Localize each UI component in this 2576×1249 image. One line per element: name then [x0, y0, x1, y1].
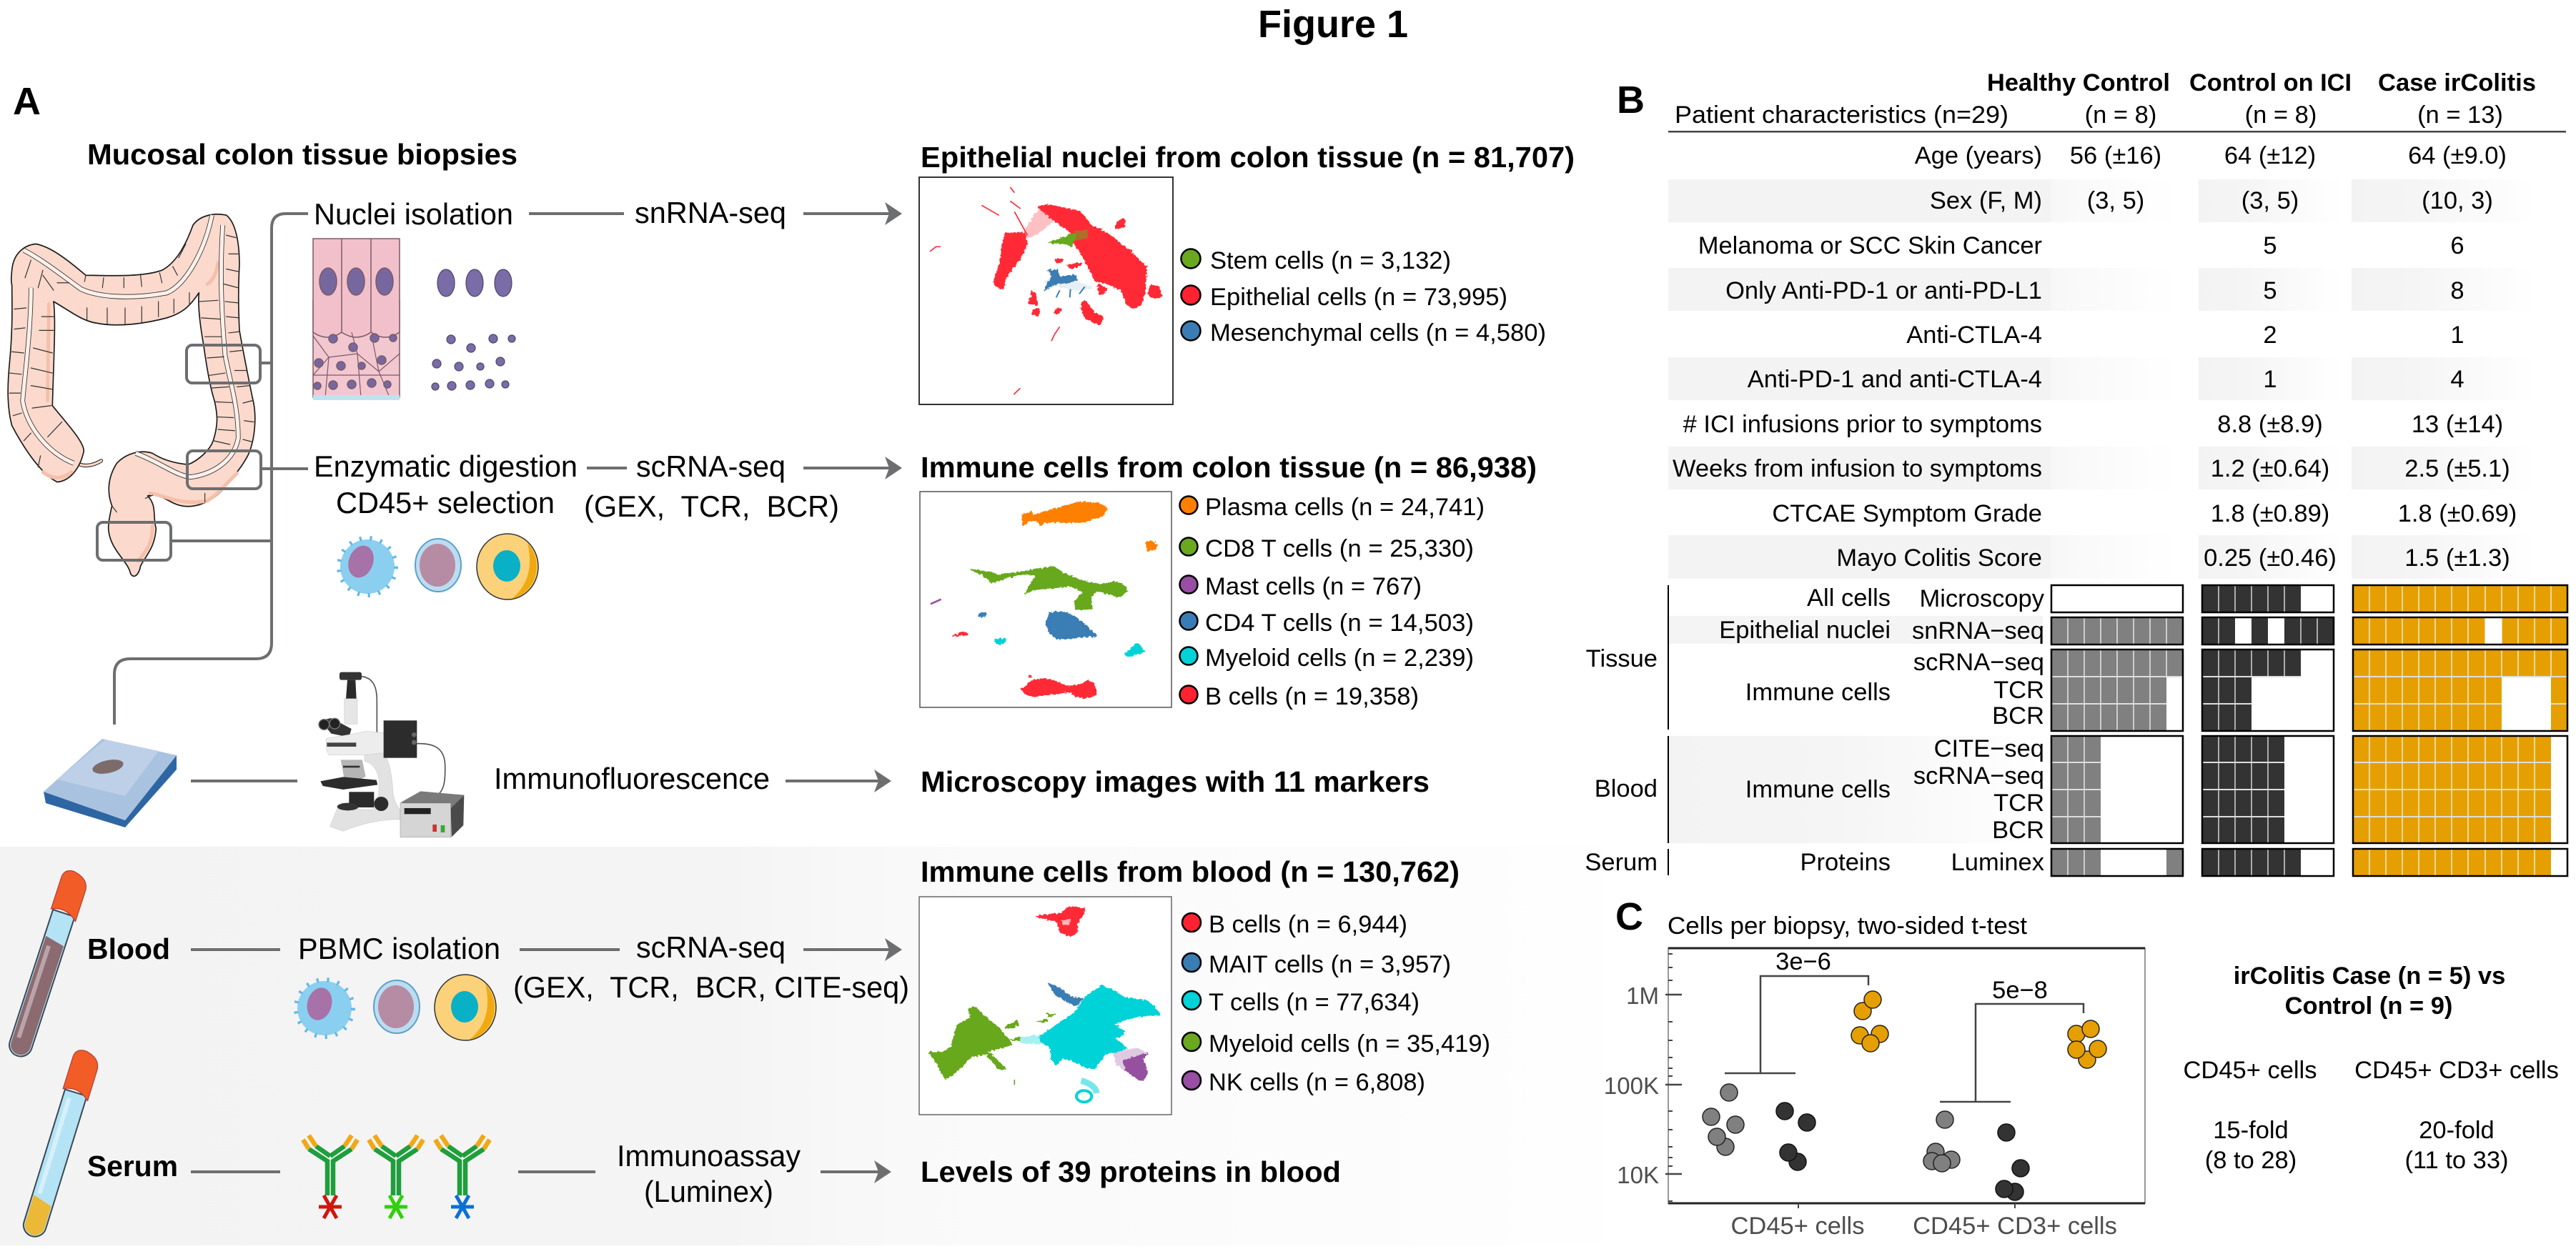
panel A: study workflow — [4, 80, 1575, 1240]
assay labels: scRNA−seq — [1913, 649, 2044, 676]
table rows: 64 (±12) — [2224, 142, 2316, 169]
table rows: 4 — [2450, 366, 2464, 393]
table rows: 1.8 (±0.89) — [2211, 500, 2329, 527]
table rows: Age (years) — [1915, 142, 2042, 169]
legend: blood: B cells (n = 6,944) — [1209, 911, 1407, 938]
panel letter B: B — [1617, 79, 1645, 121]
assay row shading and brackets — [1668, 585, 2044, 875]
table rows: CTCAE Symptom Grade — [1772, 500, 2042, 527]
legend: immune tissue — [1179, 494, 1485, 710]
text: nuclei isolation: Nuclei isolation — [314, 197, 513, 231]
significance bracket left — [1725, 948, 1868, 1073]
legend: immune tissue: CD8 T cells (n = 25,330) — [1205, 535, 1474, 562]
icon: tissue slide — [44, 739, 177, 827]
table rows: 8.8 (±8.9) — [2217, 411, 2323, 438]
fold-change summary: Control (n = 9) — [2285, 992, 2452, 1020]
heading: protein levels: Levels of 39 proteins in blood — [921, 1155, 1341, 1188]
x axis labels: CD45+ cells — [1731, 1213, 1864, 1240]
assay labels: Blood — [1595, 775, 1658, 802]
arrow to epithelial UMAP — [803, 202, 902, 225]
panel C: cells per biopsy — [1604, 895, 2559, 1240]
dots: control on ICI — [1776, 1103, 2029, 1200]
table rows: Mayo Colitis Score — [1836, 544, 2042, 572]
table rows: 1.8 (±0.69) — [2398, 500, 2517, 527]
heatmap: healthy control — [2051, 585, 2183, 876]
table rows: Only Anti-PD-1 or anti-PD-L1 — [1725, 277, 2042, 304]
x axis labels: CD45+ CD3+ cells — [1913, 1213, 2117, 1240]
legend: epithelial: Epithelial cells (n = 73,995) — [1210, 284, 1507, 311]
icon: microscope — [319, 672, 464, 837]
heading: mucosal biopsies: Mucosal colon tissue biopsies — [87, 138, 517, 171]
assay labels: Proteins — [1800, 849, 1891, 876]
table rows: # ICI infusions prior to symptoms — [1683, 411, 2042, 438]
icon: colon anatomy — [8, 214, 255, 576]
assay labels: Epithelial nuclei — [1719, 617, 1891, 644]
assay labels: CITE−seq — [1934, 735, 2044, 762]
legend: blood — [1182, 911, 1490, 1096]
table rows: Melanoma or SCC Skin Cancer — [1698, 232, 2042, 259]
table header: Healthy Control — [1987, 69, 2170, 96]
arrow to immune UMAP — [803, 457, 902, 479]
table rows — [1673, 142, 2517, 572]
assay labels: Tissue — [1586, 645, 1658, 672]
assay labels: snRNA−seq — [1912, 617, 2044, 645]
table header: (n = 8) — [2085, 101, 2156, 129]
line PBMC to scRNA-seq — [520, 948, 620, 951]
colon haustra — [9, 235, 254, 512]
text: scRNA-seq blood: scRNA-seq — [636, 930, 786, 964]
text: scRNA-seq blood: (GEX, TCR, BCR, CITE-seq) — [513, 970, 909, 1004]
fold-change summary: CD45+ CD3+ cells — [2354, 1057, 2559, 1084]
line serum to antibodies — [191, 1170, 280, 1173]
icon: isolated nuclei — [432, 269, 515, 390]
line blood to PBMC — [191, 948, 280, 951]
text: scRNA-seq tissue: scRNA-seq — [636, 449, 786, 483]
table rows: Sex (F, M) — [1930, 187, 2042, 214]
chart: dot plot — [1604, 948, 2145, 1240]
text: immunoassay — [617, 1139, 801, 1208]
fold-change summary: CD45+ cells — [2184, 1057, 2317, 1084]
text: immunofluorescence: Immunofluorescence — [494, 762, 770, 795]
table rows: 6 — [2450, 232, 2464, 259]
table rows: 5 — [2263, 232, 2277, 259]
table rows: 2.5 (±5.1) — [2404, 455, 2510, 482]
dots: healthy — [1703, 1084, 1960, 1172]
significance bracket right — [1940, 977, 2084, 1102]
text: snRNA-seq: snRNA-seq — [635, 196, 786, 229]
table rows: 2 — [2263, 322, 2277, 349]
icon: serum tube — [19, 1048, 101, 1240]
colon shading — [43, 263, 237, 561]
legend: blood: MAIT cells (n = 3,957) — [1209, 951, 1451, 978]
legend: immune tissue: CD4 T cells (n = 14,503) — [1205, 609, 1474, 637]
fold-change summary: (11 to 33) — [2404, 1147, 2509, 1174]
table rows: (3, 5) — [2241, 187, 2299, 214]
heading: immune cells from blood: Immune cells from blood (n = 130,762) — [921, 855, 1460, 888]
figure title: Figure 1 — [1258, 3, 1408, 46]
fold-change summary: (8 to 28) — [2205, 1147, 2297, 1174]
chart: epithelial UMAP — [919, 177, 1173, 404]
table rows: 5 — [2263, 277, 2277, 304]
fold-change summary: irColitis Case (n = 5) vs — [2234, 962, 2505, 990]
y axis ticks and labels: 10K — [1617, 1162, 1659, 1188]
table rows: 1 — [2450, 322, 2464, 349]
y axis ticks and labels: 1M — [1626, 982, 1659, 1009]
assay labels: Serum — [1585, 849, 1658, 876]
icon: blood tube — [4, 868, 90, 1060]
assay labels: TCR — [1993, 790, 2044, 817]
connector lines: biopsy sites — [97, 214, 308, 725]
icon: PBMC cells — [297, 975, 496, 1040]
legend: blood: NK cells (n = 6,808) — [1209, 1069, 1425, 1096]
table rows: (10, 3) — [2422, 187, 2493, 214]
assay labels: Luminex — [1951, 849, 2044, 876]
table header: Patient characteristics (n=29) — [1675, 101, 2008, 129]
text: scRNA-seq blood — [513, 930, 909, 1004]
significance bracket left: 3e−6 — [1775, 948, 1831, 975]
panel letter C: C — [1615, 895, 1643, 938]
y axis ticks and labels — [1604, 954, 1682, 1201]
line to snRNA-seq — [529, 212, 624, 215]
legend: immune tissue: Myeloid cells (n = 2,239) — [1205, 645, 1474, 672]
arrow to protein levels — [821, 1160, 891, 1183]
y axis ticks and labels: 100K — [1604, 1073, 1659, 1099]
fold-change summary — [2184, 962, 2559, 1174]
text: immunoassay: (Luminex) — [644, 1175, 773, 1208]
legend: immune tissue: Plasma cells (n = 24,741) — [1205, 494, 1485, 521]
row shading — [1668, 179, 2537, 579]
table rows: 64 (±9.0) — [2408, 142, 2507, 169]
assay labels — [1585, 584, 2045, 876]
significance bracket right: 5e−8 — [1992, 977, 2048, 1004]
chart: immune tissue UMAP — [920, 492, 1171, 707]
legend: epithelial: Mesenchymal cells (n = 4,580) — [1210, 319, 1546, 347]
table rows: (3, 5) — [2087, 187, 2144, 214]
colon bands — [23, 215, 238, 477]
heatmap: control on ICI — [2202, 585, 2334, 876]
assay labels: BCR — [1992, 702, 2044, 730]
line slide to microscope — [191, 780, 297, 782]
text: enzymatic digestion: Enzymatic digestion — [314, 449, 578, 483]
text: PBMC isolation: PBMC isolation — [298, 932, 500, 965]
legend: blood: Myeloid cells (n = 35,419) — [1209, 1030, 1490, 1058]
assay labels: TCR — [1993, 677, 2044, 704]
table rows: Anti-CTLA-4 — [1906, 322, 2042, 349]
table rows: 13 (±14) — [2412, 411, 2503, 438]
legend: immune tissue: Mast cells (n = 767) — [1205, 573, 1422, 600]
text: immunoassay: Immunoassay — [617, 1139, 801, 1173]
panel letter A: A — [13, 80, 41, 123]
assay labels: scRNA−seq — [1913, 762, 2044, 790]
table rows: 0.25 (±0.46) — [2204, 544, 2337, 572]
icon: epithelial cells — [313, 239, 400, 400]
heading: immune cells tissue: Immune cells from colon tissue (n = 86,938) — [921, 451, 1537, 484]
legend: blood: T cells (n = 77,634) — [1209, 989, 1420, 1016]
text: scRNA-seq tissue: (GEX, TCR, BCR) — [584, 489, 839, 523]
panel B: patient table — [1585, 69, 2567, 876]
line antibodies to immunoassay — [518, 1170, 595, 1173]
table rows: 8 — [2450, 277, 2464, 304]
text: scRNA-seq tissue — [584, 449, 839, 523]
table header — [1668, 69, 2566, 133]
text: enzymatic digestion — [314, 449, 578, 519]
legend: immune tissue: B cells (n = 19,358) — [1205, 683, 1419, 710]
icon: antibodies — [303, 1135, 490, 1218]
table rows: 1.2 (±0.64) — [2211, 455, 2329, 482]
assay labels: Microscopy — [1920, 585, 2045, 612]
arrow to blood UMAP — [803, 938, 902, 961]
table rows: 56 (±16) — [2070, 142, 2161, 169]
assay labels: Immune cells — [1745, 679, 1891, 706]
chart: blood UMAP — [919, 897, 1171, 1115]
line to scRNA-seq — [587, 467, 627, 469]
table rows: Weeks from infusion to symptoms — [1673, 455, 2042, 482]
table rows: 1 — [2263, 366, 2277, 393]
assay labels: BCR — [1992, 817, 2044, 844]
icon: tissue immune cells — [340, 534, 538, 599]
table rows: Anti-PD-1 and anti-CTLA-4 — [1748, 366, 2042, 393]
fold-change summary: 15-fold — [2213, 1117, 2289, 1144]
label: blood: Blood — [87, 932, 170, 965]
assay labels: All cells — [1807, 584, 1891, 612]
table header: (n = 13) — [2417, 101, 2503, 129]
heading: epithelial nuclei: Epithelial nuclei from colon tissue (n = 81,707) — [921, 141, 1575, 174]
table rows: 1.5 (±1.3) — [2404, 544, 2510, 572]
assay labels: Immune cells — [1745, 776, 1891, 803]
x axis labels — [1731, 1203, 2117, 1240]
label: serum: Serum — [87, 1150, 178, 1183]
table header: Control on ICI — [2189, 69, 2352, 96]
legend: epithelial — [1181, 247, 1546, 347]
heatmap: case irColitis — [2353, 585, 2567, 876]
dots: irColitis — [1851, 991, 2106, 1068]
legend: epithelial: Stem cells (n = 3,132) — [1210, 247, 1451, 274]
table header: (n = 8) — [2245, 101, 2317, 129]
shaded background: blood and serum — [0, 847, 1601, 1245]
chart title: Cells per biopsy, two-sided t-test — [1668, 912, 2027, 940]
table header: Case irColitis — [2378, 69, 2536, 96]
text: enzymatic digestion: CD45+ selection — [336, 486, 555, 519]
heading: microscopy images: Microscopy images with 11 markers — [921, 765, 1430, 798]
fold-change summary: 20-fold — [2419, 1117, 2495, 1144]
arrow to microscopy — [786, 770, 891, 792]
